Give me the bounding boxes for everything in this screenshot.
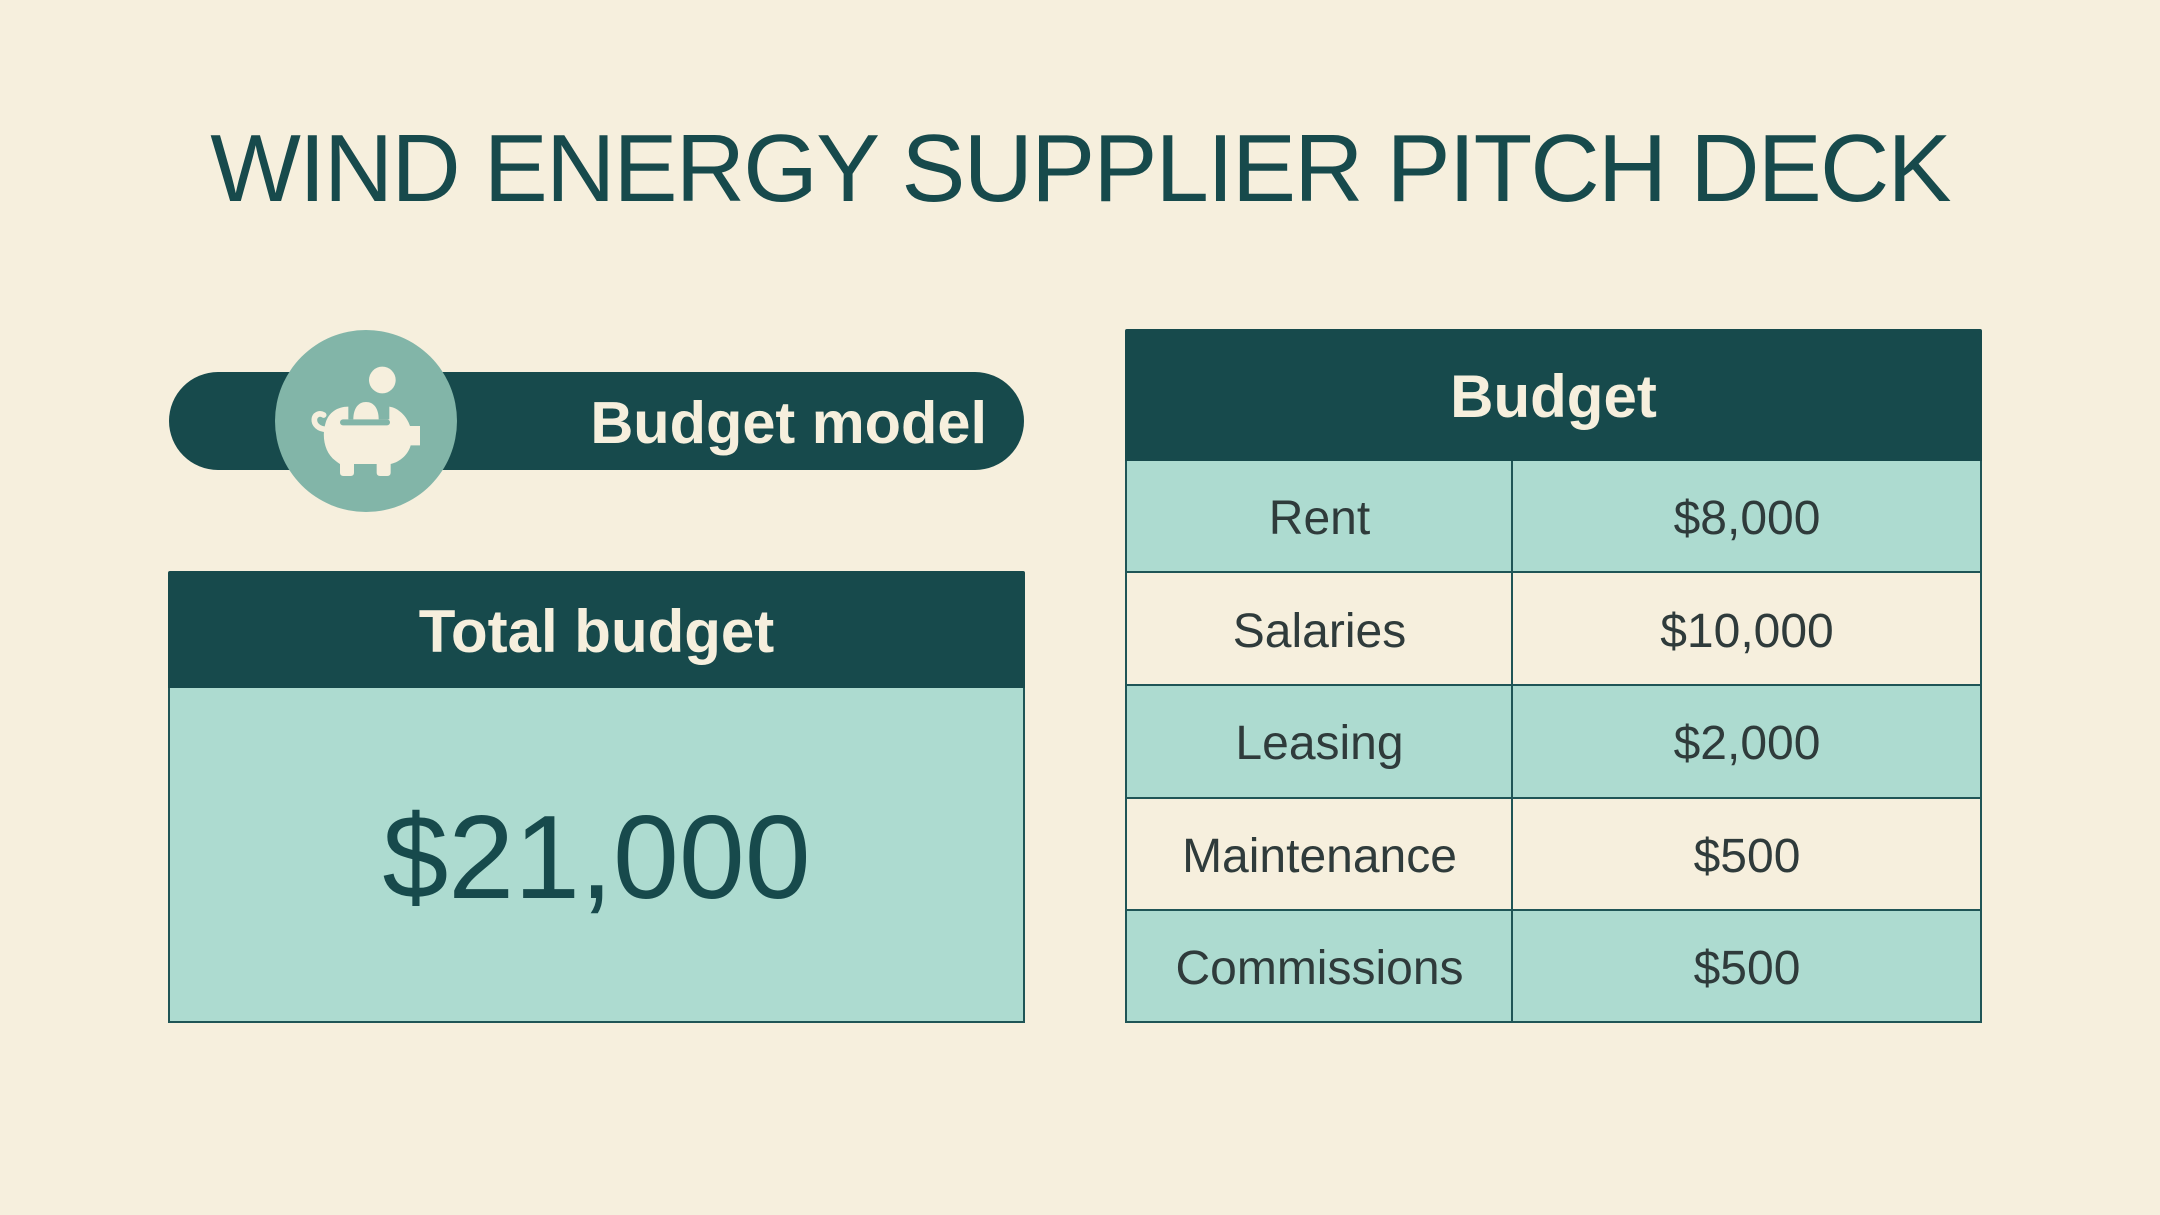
heading pill: budget model xyxy=(169,372,1024,470)
icon: piggy bank with coin xyxy=(275,330,457,512)
table: budget xyxy=(1125,329,1982,1023)
table header xyxy=(1125,329,1982,461)
total budget header: Total budget xyxy=(419,598,774,665)
row: commissions: Commissions xyxy=(1175,942,1464,995)
row: maintenance xyxy=(1182,830,1800,882)
title: WIND ENERGY SUPPLIER PITCH DECK xyxy=(210,115,1950,222)
total budget header xyxy=(168,571,1025,689)
total budget value: $21,000 xyxy=(382,792,811,924)
row: leasing: Leasing xyxy=(1235,717,1404,770)
pill label: Budget model xyxy=(590,389,987,456)
row: salaries xyxy=(1233,604,1834,658)
row: rent: Rent xyxy=(1269,492,1370,545)
row: commissions xyxy=(1125,910,1982,1023)
row: rent xyxy=(1125,461,1982,573)
row: commissions: $500 xyxy=(1694,942,1800,995)
total budget value xyxy=(168,688,1025,1023)
row: maintenance: $500 xyxy=(1694,830,1800,882)
row: leasing xyxy=(1125,685,1982,797)
row: rent: $8,000 xyxy=(1674,492,1820,545)
row: salaries: $10,000 xyxy=(1660,604,1834,658)
table header: Budget xyxy=(1450,363,1657,430)
row: leasing: $2,000 xyxy=(1674,717,1820,770)
row: salaries: Salaries xyxy=(1233,604,1406,658)
panel: total budget xyxy=(168,571,1025,1023)
row: maintenance: Maintenance xyxy=(1182,830,1457,882)
